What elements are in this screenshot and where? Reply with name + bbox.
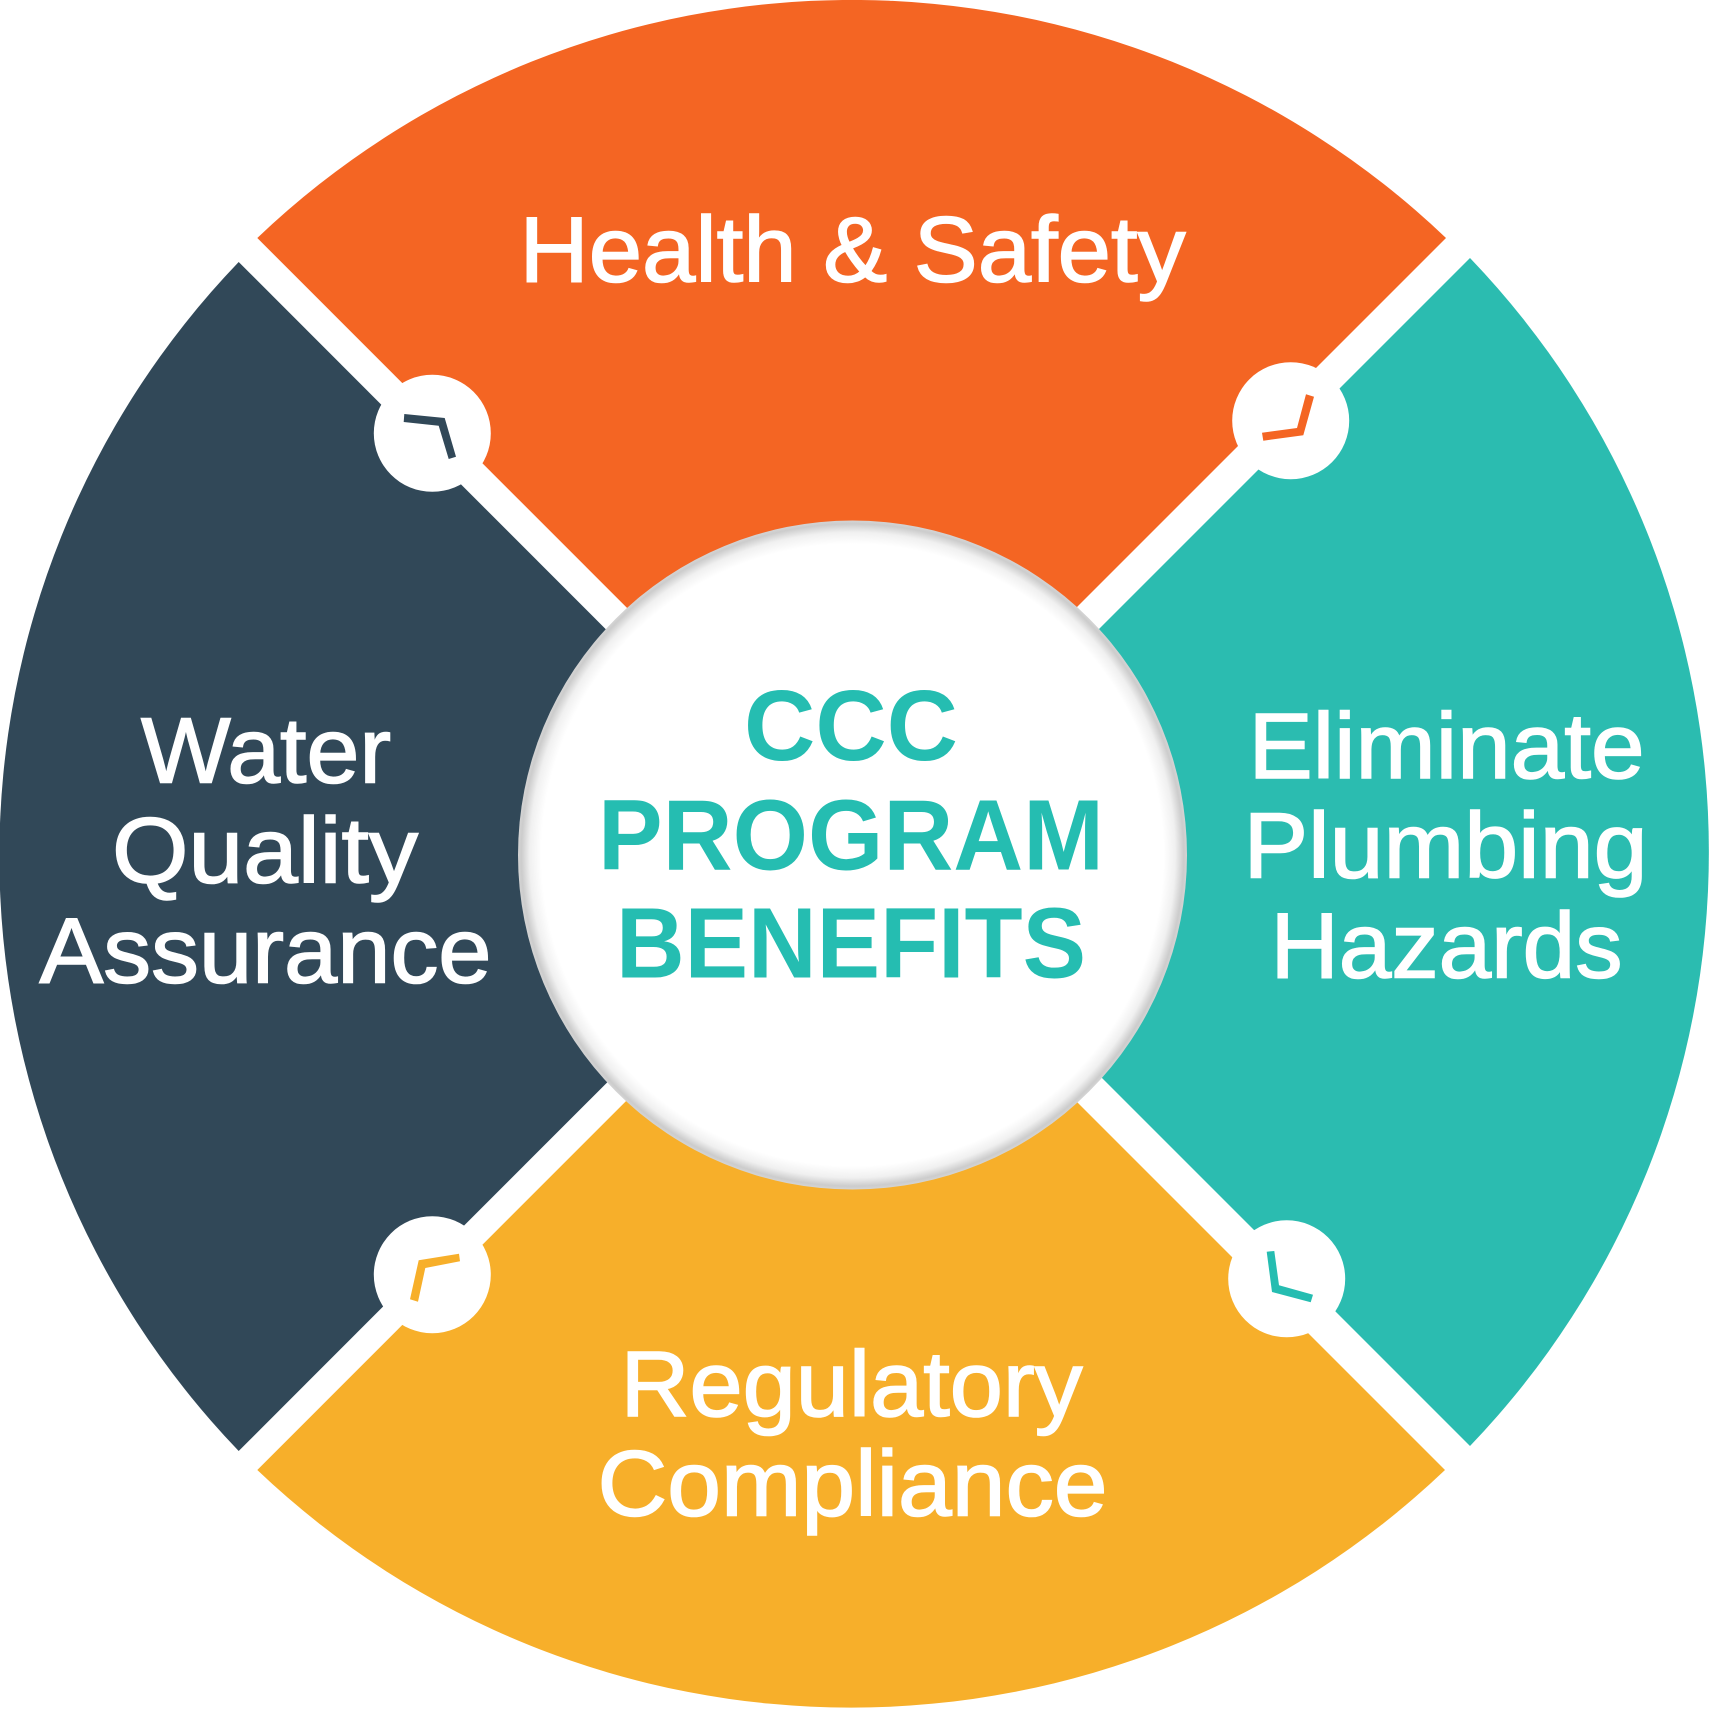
label: health and safety: Health & Safety bbox=[520, 198, 1186, 302]
label: water quality assurance bbox=[40, 699, 491, 1003]
panel: eliminate plumbing hazards bbox=[876, 258, 1709, 1446]
label: regulatory compliance bbox=[598, 1332, 1108, 1536]
label: regulatory compliance: Compliance bbox=[598, 1432, 1108, 1536]
center title: PROGRAM bbox=[598, 780, 1104, 892]
label: water quality assurance: Assurance bbox=[40, 899, 491, 1003]
label: eliminate plumbing hazards: Plumbing bbox=[1244, 794, 1648, 898]
panel: water quality assurance bbox=[0, 262, 833, 1451]
label: water quality assurance: Water bbox=[141, 699, 391, 803]
label: water quality assurance: Quality bbox=[112, 799, 419, 903]
label: eliminate plumbing hazards: Eliminate bbox=[1248, 694, 1644, 798]
center title bbox=[598, 670, 1104, 1000]
label: eliminate plumbing hazards bbox=[1244, 694, 1648, 998]
icon: clock marker top left bbox=[374, 375, 491, 492]
center circle bbox=[518, 520, 1187, 1190]
icon: clock marker top right bbox=[1232, 362, 1349, 479]
panel: regulatory compliance bbox=[257, 876, 1445, 1708]
icon: clock marker bottom right bbox=[1228, 1220, 1345, 1337]
center title: CCC bbox=[744, 670, 958, 782]
center title: BENEFITS bbox=[616, 888, 1086, 1000]
icon: clock marker bottom left bbox=[374, 1216, 491, 1333]
label: regulatory compliance: Regulatory bbox=[620, 1332, 1083, 1436]
label: eliminate plumbing hazards: Hazards bbox=[1270, 894, 1622, 998]
